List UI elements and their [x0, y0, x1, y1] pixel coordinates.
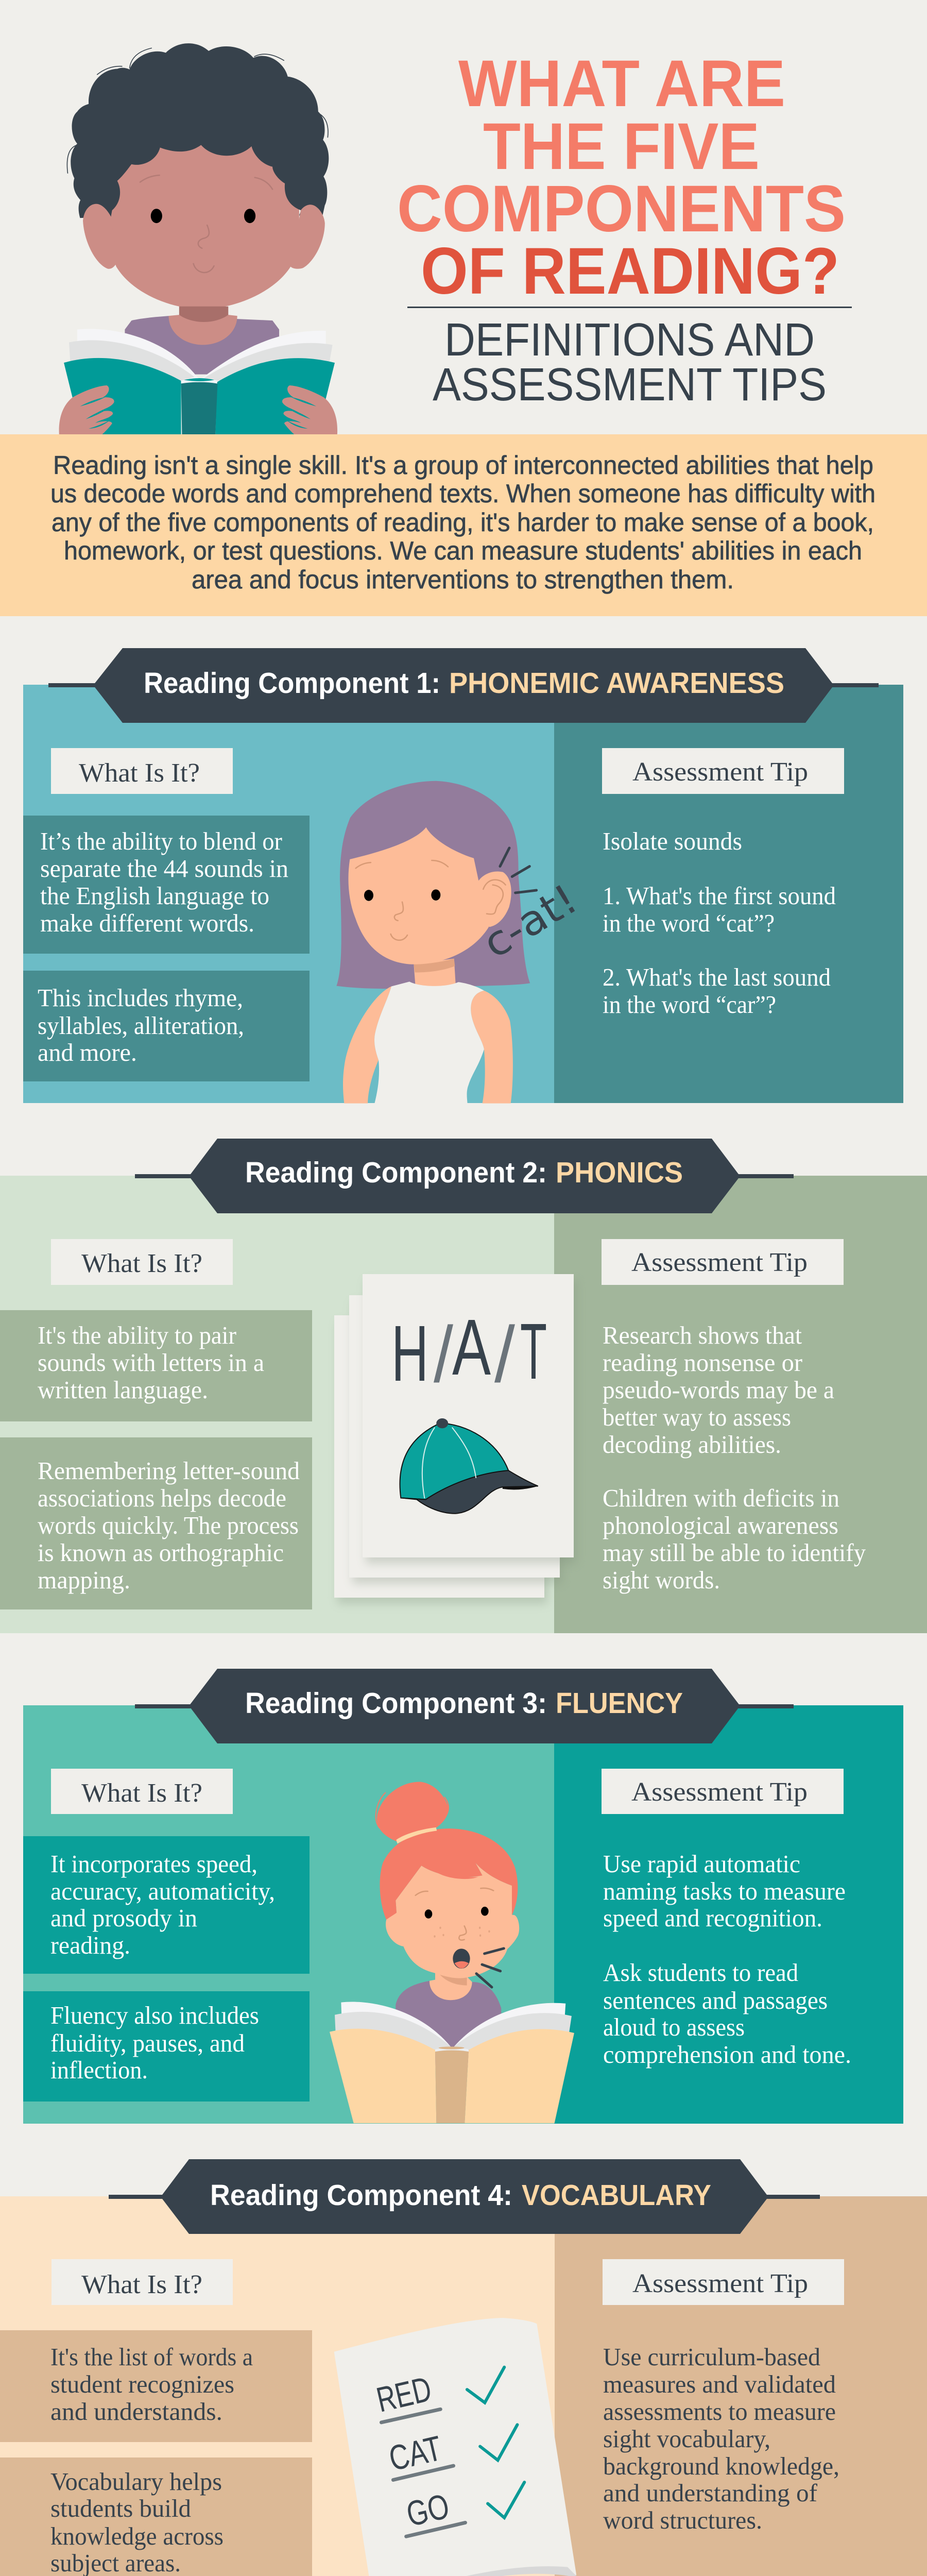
- assessment tip text: Use curriculum-based: [603, 2343, 820, 2371]
- label: what is it: What Is It?: [81, 1249, 202, 1278]
- title: what are the five components of reading: WHAT ARE: [458, 47, 785, 121]
- panel: component 4 vocabulary: [0, 2159, 927, 2576]
- assessment tip text: [603, 1321, 866, 1594]
- definition box 2: syllables, alliteration,: [38, 1011, 244, 1040]
- ribbon heading 1: [48, 648, 879, 723]
- ribbon heading 4: [109, 2159, 820, 2234]
- intro band: us decode words and comprehend texts. When someone has difficulty with: [50, 479, 876, 508]
- assessment tip text: comprehension and tone.: [603, 2040, 851, 2069]
- illustration: girl listening to sounds: c-at!: [475, 875, 586, 968]
- definition box 1: and prosody in: [50, 1904, 197, 1932]
- ribbon heading 2: PHONICS: [556, 1156, 683, 1189]
- definition box 1: reading.: [50, 1931, 130, 1959]
- illustration: stacked flash cards with H/A/T and cap: [334, 1274, 577, 1604]
- label: assessment tip: [602, 748, 844, 794]
- definition box 1: It incorporates speed,: [50, 1850, 258, 1878]
- definition box 1: It's the list of words a: [50, 2343, 253, 2371]
- assessment tip text: measures and validated: [603, 2370, 836, 2398]
- definition box 2: inflection.: [50, 2056, 148, 2084]
- label: what is it: [52, 2259, 233, 2305]
- label: what is it: What Is It?: [81, 1778, 202, 1808]
- definition box 1: [0, 2330, 312, 2442]
- assessment tip text: pseudo-words may be a: [603, 1376, 834, 1404]
- label: assessment tip: [602, 1239, 844, 1285]
- ribbon heading 4: VOCABULARY: [522, 2179, 711, 2212]
- ribbon heading 2: Reading Component 2:: [245, 1156, 547, 1189]
- assessment tip text: 2. What's the last sound: [603, 963, 831, 991]
- assessment tip text: Research shows that: [603, 1321, 802, 1349]
- definition box 2: words quickly. The process: [38, 1511, 299, 1539]
- label: what is it: [51, 748, 233, 794]
- definition box 2: [0, 1437, 312, 1609]
- definition box 2: [0, 2458, 312, 2576]
- definition box 2: [23, 971, 310, 1081]
- word: H/A/T: /: [494, 1310, 515, 1399]
- assessment tip text: sight vocabulary,: [603, 2425, 770, 2453]
- definition box 1: written language.: [38, 1376, 208, 1404]
- panel: component 2 phonics: [0, 1139, 927, 1633]
- assessment tip text: [603, 1850, 851, 2069]
- definition box 1: student recognizes: [50, 2370, 234, 2398]
- definition box 2: is known as orthographic: [38, 1538, 284, 1567]
- definition box 2: [23, 1991, 310, 2102]
- ribbon heading 2: [135, 1139, 794, 1213]
- title: what are the five components of reading: OF READING?: [421, 234, 839, 308]
- ribbon heading 1: Reading Component 1:: [144, 667, 440, 700]
- title: what are the five components of reading: THE FIVE: [483, 110, 760, 183]
- assessment tip text: may still be able to identify: [603, 1538, 866, 1567]
- word: GO: GO: [403, 2486, 453, 2534]
- definition box 1: make different words.: [40, 909, 254, 937]
- word: H/A/T: H: [391, 1309, 428, 1398]
- label: assessment tip: Assessment Tip: [631, 1248, 808, 1277]
- assessment tip text: word structures.: [603, 2506, 762, 2534]
- word: H/A/T: [391, 1303, 547, 1399]
- definition box 2: associations helps decode: [38, 1484, 286, 1512]
- definition box 1: [23, 816, 310, 954]
- definition box 2: and more.: [38, 1038, 137, 1066]
- definition box 2: This includes rhyme,: [38, 984, 243, 1012]
- assessment tip text: background knowledge,: [603, 2452, 839, 2480]
- assessment tip text: in the word “car”?: [603, 990, 776, 1019]
- word: RED: RED: [373, 2369, 435, 2420]
- definition box 1: accuracy, automaticity,: [50, 1877, 275, 1905]
- assessment tip text: Isolate sounds: [603, 827, 742, 855]
- illustration: checked word list on curled paper: [334, 2318, 578, 2576]
- assessment tip text: decoding abilities.: [603, 1430, 781, 1459]
- label: assessment tip: [603, 2259, 844, 2305]
- definition box 1: It's the ability to pair: [38, 1321, 236, 1349]
- definition box 2: students build: [50, 2494, 191, 2522]
- panel: component 3 fluency: [23, 1669, 903, 2124]
- assessment tip text: in the word “cat”?: [603, 909, 775, 937]
- panel: component 1 phonemic awareness: [23, 648, 903, 1104]
- assessment tip text: reading nonsense or: [603, 1348, 802, 1377]
- ribbon heading 1: PHONEMIC AWARENESS: [449, 667, 784, 700]
- subtitle: definitions and assessment tips: DEFINITIONS AND: [444, 314, 815, 366]
- definition box 1: sounds with letters in a: [38, 1348, 264, 1377]
- label: what is it: [51, 1239, 233, 1285]
- assessment tip text: sight words.: [603, 1566, 720, 1594]
- assessment tip text: [603, 827, 836, 1019]
- intro band: area and focus interventions to strengthen them.: [192, 565, 734, 594]
- assessment tip text: Children with deficits in: [603, 1484, 839, 1512]
- subtitle: definitions and assessment tips: [433, 314, 827, 411]
- intro band: Reading isn't a single skill. It's a group of interconnected abilities that help: [53, 451, 873, 480]
- definition box 1: It’s the ability to blend or: [40, 827, 282, 855]
- intro band: any of the five components of reading, it's harder to make sense of a book,: [52, 508, 874, 537]
- assessment tip text: naming tasks to measure: [603, 1877, 846, 1905]
- assessment tip text: speed and recognition.: [603, 1904, 822, 1932]
- title: what are the five components of reading: [397, 47, 846, 308]
- assessment tip text: phonological awareness: [603, 1511, 838, 1539]
- assessment tip text: and understanding of: [603, 2479, 818, 2507]
- definition box 2: mapping.: [38, 1566, 130, 1594]
- definition box 1: and understands.: [50, 2397, 222, 2426]
- title: what are the five components of reading: COMPONENTS: [397, 172, 846, 246]
- illustration: girl listening to sounds: [336, 781, 586, 1104]
- definition box 2: fluidity, pauses, and: [50, 2029, 245, 2057]
- word: H/A/T: /: [434, 1310, 453, 1399]
- word: H/A/T: A: [452, 1303, 491, 1392]
- assessment tip text: sentences and passages: [603, 1986, 828, 2014]
- assessment tip text: 1. What's the first sound: [603, 882, 836, 910]
- definition box 2: knowledge across: [50, 2522, 224, 2550]
- assessment tip text: aloud to assess: [603, 2013, 745, 2041]
- definition box 1: [23, 1836, 310, 1974]
- word: H/A/T: T: [520, 1307, 547, 1396]
- assessment tip text: Use rapid automatic: [603, 1850, 800, 1878]
- ribbon heading 3: Reading Component 3:: [245, 1687, 547, 1720]
- label: assessment tip: Assessment Tip: [632, 2269, 808, 2298]
- icon: baseball cap: [400, 1418, 538, 1514]
- label: assessment tip: Assessment Tip: [632, 757, 808, 787]
- label: what is it: What Is It?: [79, 758, 200, 788]
- ribbon heading 3: FLUENCY: [556, 1687, 683, 1720]
- word: CAT: CAT: [385, 2429, 445, 2479]
- illustration: curly-haired child reading a teal book: [59, 43, 337, 434]
- intro band: homework, or test questions. We can measure students' abilities in each: [64, 536, 862, 565]
- ribbon heading 3: [135, 1669, 794, 1743]
- definition box 1: the English language to: [40, 882, 269, 910]
- intro band: [0, 434, 927, 616]
- label: assessment tip: Assessment Tip: [631, 1777, 808, 1807]
- definition box 2: Remembering letter-sound: [38, 1456, 300, 1485]
- ribbon heading 4: Reading Component 4:: [210, 2179, 512, 2212]
- assessment tip text: better way to assess: [603, 1403, 791, 1431]
- assessment tip text: [603, 2343, 839, 2534]
- label: what is it: What Is It?: [81, 2270, 202, 2299]
- definition box 2: Fluency also includes: [50, 2001, 259, 2029]
- subtitle: definitions and assessment tips: ASSESSMENT TIPS: [433, 359, 827, 411]
- label: assessment tip: [602, 1769, 844, 1814]
- definition box 1: separate the 44 sounds in: [40, 854, 288, 883]
- assessment tip text: Ask students to read: [603, 1958, 798, 1987]
- definition box 2: Vocabulary helps: [50, 2467, 222, 2496]
- illustration: girl with bun reading aloud: [330, 1782, 574, 2123]
- assessment tip text: assessments to measure: [603, 2397, 836, 2426]
- definition box 1: [0, 1310, 312, 1421]
- label: what is it: [51, 1769, 233, 1814]
